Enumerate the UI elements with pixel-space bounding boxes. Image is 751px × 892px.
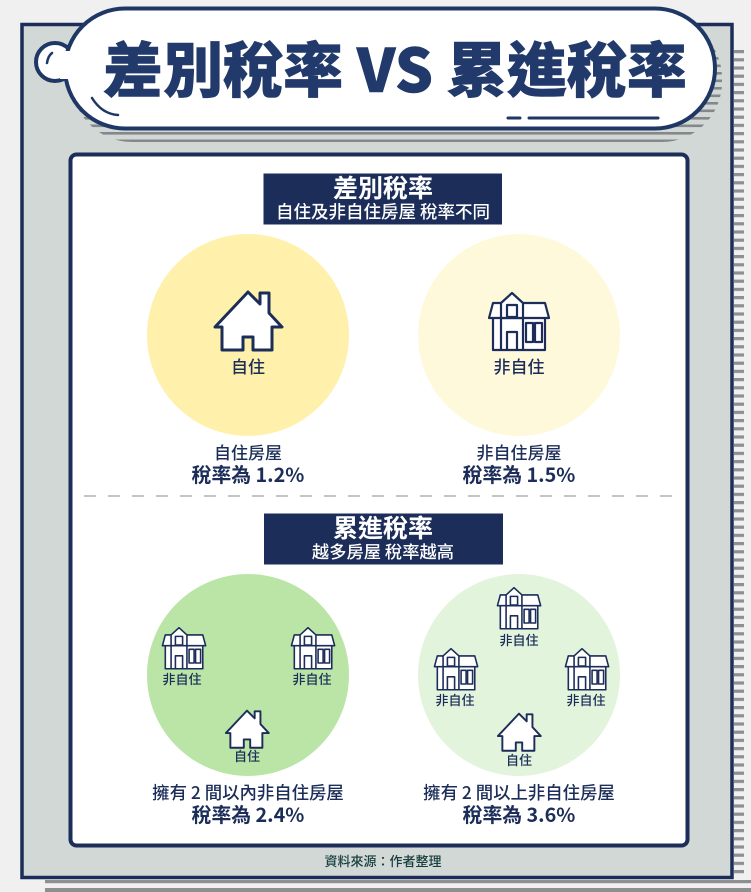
text: owner-occupied rate: 稅率為 1.2%: [192, 459, 304, 488]
circle: up to two non owner-occupied: [147, 574, 349, 776]
heading: differential tax rate: 差別稅率: [333, 169, 433, 205]
circle: owner-occupied: 自住: [231, 353, 265, 378]
circle: more than two non owner-occupied: 非自住: [435, 690, 475, 709]
text: owner-occupied rate: [192, 439, 304, 488]
main white card: [70, 154, 688, 846]
text: up to two rate: [152, 780, 344, 828]
circle: non owner-occupied: [418, 234, 620, 436]
text: up to two rate: 稅率為 2.4%: [192, 799, 304, 828]
text: owner-occupied rate: 自住房屋: [214, 439, 282, 464]
title banner: [36, 8, 722, 142]
text: non owner-occupied rate: 非自住房屋: [476, 439, 562, 464]
circle: more than two non owner-occupied: 非自住: [566, 690, 606, 709]
text: non owner-occupied rate: 稅率為 1.5%: [463, 459, 575, 488]
text: up to two rate: 擁有 2 間以內非自住房屋: [152, 780, 344, 805]
circle: up to two non owner-occupied: 非自住: [162, 669, 202, 688]
heading: differential tax rate: [264, 169, 502, 224]
circle: more than two non owner-occupied: 非自住: [499, 630, 539, 649]
heading: progressive tax rate: 越多房屋 稅率越高: [312, 538, 454, 563]
heading: progressive tax rate: 累進稅率: [333, 509, 433, 545]
circle: up to two non owner-occupied: 非自住: [292, 669, 332, 688]
circle: more than two non owner-occupied: [418, 574, 620, 776]
text: non owner-occupied rate: [463, 439, 575, 488]
source note: 資料來源：作者整理: [324, 851, 442, 870]
circle: more than two non owner-occupied: 自住: [506, 750, 532, 769]
text: more than two rate: 稅率為 3.6%: [463, 799, 575, 828]
text: more than two rate: 擁有 2 間以上非自住房屋: [423, 780, 615, 805]
heading: differential tax rate: 自住及非自住房屋 稅率不同: [276, 199, 490, 224]
heading: progressive tax rate: [264, 509, 503, 564]
text: more than two rate: [423, 780, 615, 828]
circle: owner-occupied: [147, 234, 349, 436]
circle: up to two non owner-occupied: 自住: [234, 746, 260, 765]
circle: non owner-occupied: 非自住: [494, 353, 544, 378]
title text: 差別稅率 VS 累進稅率: [103, 23, 687, 110]
